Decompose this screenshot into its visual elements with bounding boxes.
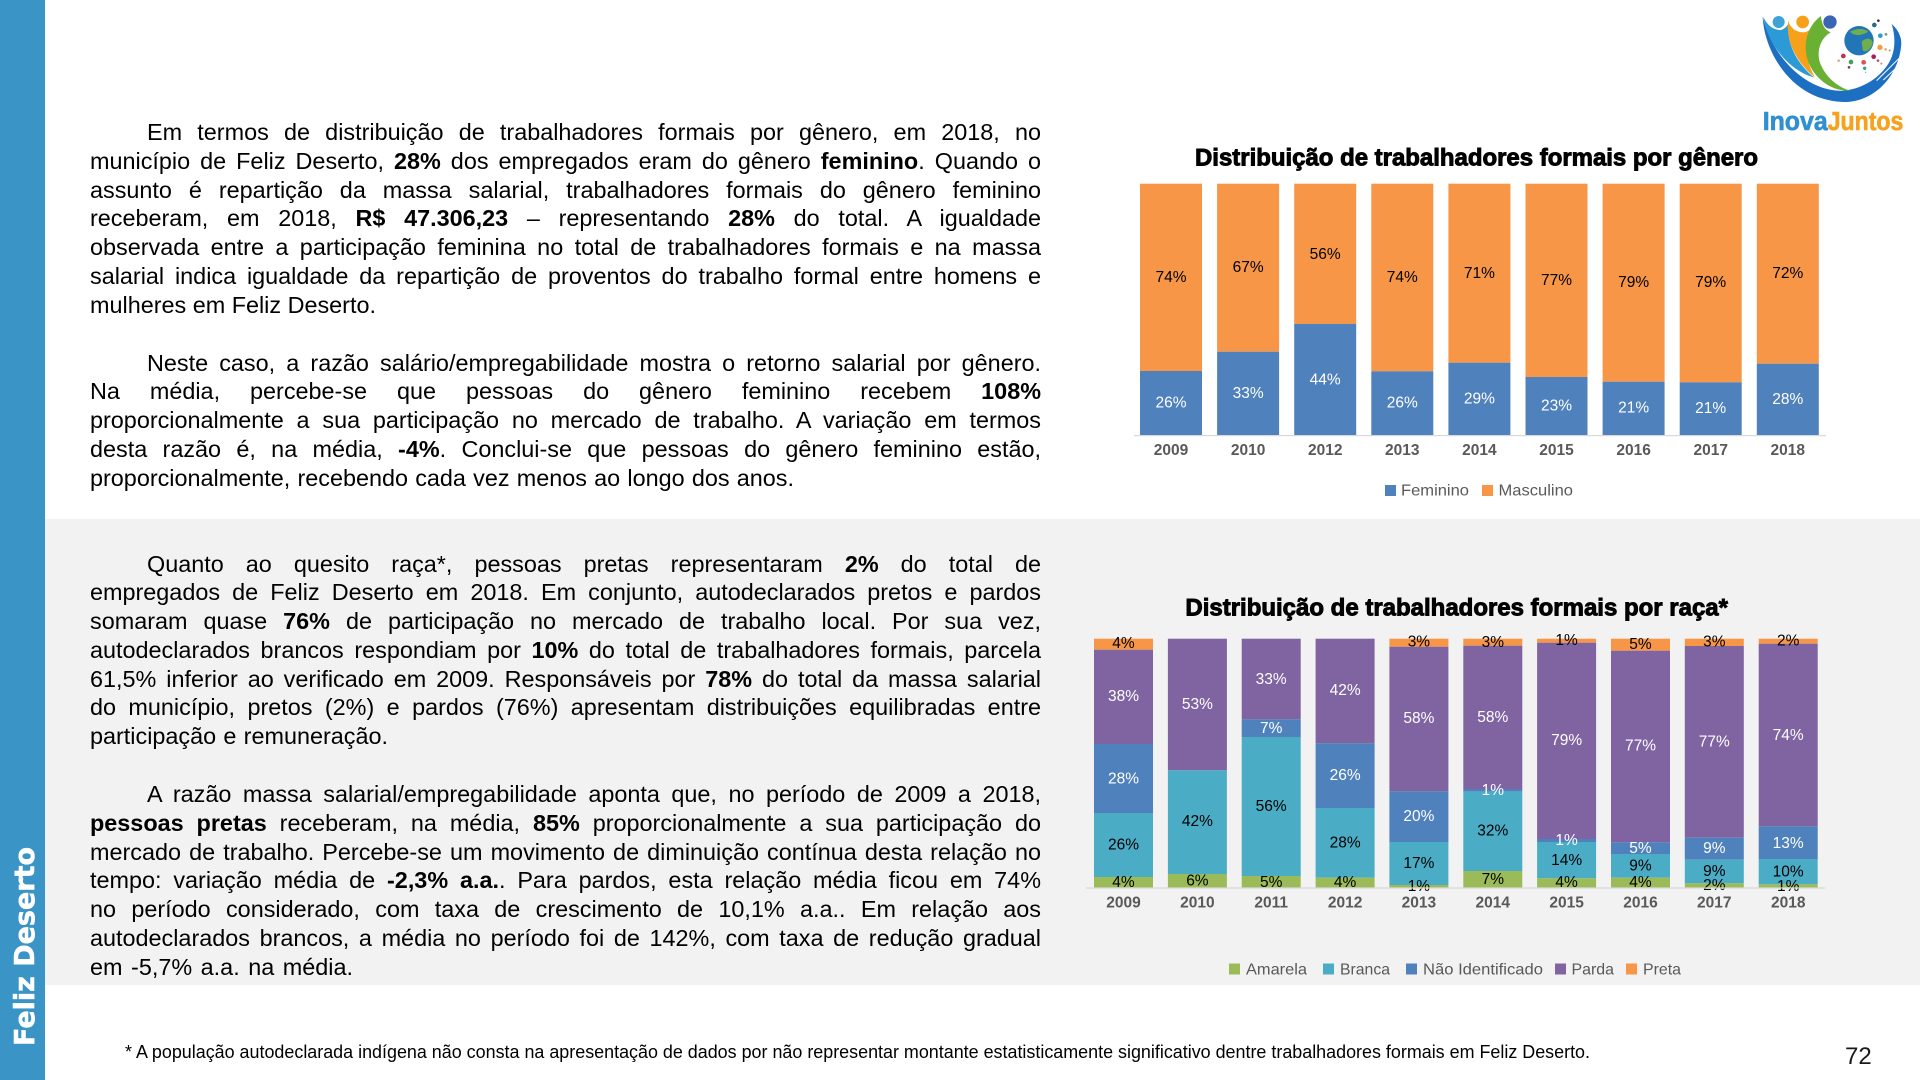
bar 2010: [1168, 639, 1227, 912]
text block: race paragraph 2: tempo: variação média de -2,3% a.a.. Para pardos, esta relação média ficou em 74%: [90, 867, 1041, 893]
bar 2015: 2015: [1549, 894, 1584, 912]
bar 2012: 42%: [1330, 682, 1361, 699]
legend: race: Branca: [1340, 962, 1390, 978]
bar 2013: 17%: [1403, 855, 1435, 872]
bar 2012: 56%: [1310, 246, 1341, 263]
bar 2009: 2009: [1154, 442, 1189, 459]
bar 2011: 7%: [1260, 720, 1283, 737]
bar 2009: 74%: [1155, 269, 1187, 286]
bar 2013: [1389, 634, 1448, 912]
bar 2013: 20%: [1403, 808, 1435, 825]
bar 2016: [1603, 184, 1665, 459]
footnote: * A população autodeclarada indígena não consta na apresentação de dados por não representar montante estatisticamente significativo dentre trabalhadores formais em Feliz Deserto.: [125, 1042, 1590, 1062]
sidebar band: [0, 0, 45, 1080]
bar 2012: 2012: [1328, 894, 1362, 912]
bar 2011: 5%: [1260, 874, 1283, 891]
bar 2011: 2011: [1254, 894, 1288, 912]
bar 2009: 2009: [1106, 894, 1141, 912]
legend: gender: Feminino: [1401, 482, 1469, 500]
bar 2017: 9%: [1703, 863, 1726, 880]
bar 2017: 2017: [1697, 894, 1732, 912]
bar 2016: 21%: [1618, 400, 1649, 416]
bar 2009: 4%: [1112, 874, 1135, 891]
bar 2015: 14%: [1551, 852, 1582, 869]
bar 2014: 29%: [1464, 390, 1495, 408]
bar 2014: [1448, 184, 1510, 459]
legend: race: Parda: [1572, 962, 1614, 978]
bar 2013: 3%: [1408, 634, 1430, 650]
bar 2015: 4%: [1555, 874, 1578, 891]
text block: gender paragraph 1: observada entre a participação feminina no total de trabalhadores formais e na massa: [90, 234, 1041, 260]
bar 2010: 2010: [1180, 894, 1215, 912]
bar 2012: [1316, 639, 1375, 912]
bar 2011: [1242, 639, 1301, 912]
legend: race: Preta: [1643, 962, 1681, 978]
page number: 72: [1845, 1043, 1872, 1070]
text block: race paragraph 1: empregados de Feliz Deserto em 2018. Em conjunto, autodeclarados pretos e pardos: [90, 579, 1041, 605]
bar 2015: [1526, 184, 1588, 459]
bar 2013: [1371, 184, 1433, 459]
bar 2010: 42%: [1182, 813, 1213, 830]
bar 2014: 7%: [1482, 871, 1504, 888]
chart title: gender: Distribuição de trabalhadores formais por gênero: [1195, 145, 1758, 172]
legend: race: Amarela: [1246, 962, 1307, 978]
text block: race paragraph 2: em -5,7% a.a. na média.: [90, 954, 353, 980]
bar 2012: 28%: [1330, 834, 1361, 852]
bar 2013: 26%: [1387, 394, 1418, 412]
bar 2017: 3%: [1703, 634, 1726, 650]
text block: gender paragraph 1: assunto é repartição da massa salarial, trabalhadores formais do gênero feminino: [90, 177, 1041, 203]
bar 2012: 26%: [1330, 767, 1361, 784]
text block: race paragraph 2: pessoas pretas receberam, na média, 85% proporcionalmente a sua participação do: [90, 810, 1041, 836]
text block: race paragraph 1: [90, 550, 1041, 749]
text block: gender paragraph 2: Neste caso, a razão salário/empregabilidade mostra o retorno salarial por gênero.: [147, 350, 1041, 376]
bar 2016: 5%: [1629, 840, 1652, 857]
text block: gender paragraph 1: [90, 119, 1041, 318]
bar 2011: 56%: [1256, 798, 1287, 815]
bar 2015: 1%: [1555, 832, 1578, 849]
stacked bar chart: gender: [1134, 184, 1826, 459]
legend: race: [1229, 962, 1681, 978]
bar 2010: 67%: [1233, 259, 1264, 276]
bar 2012: 44%: [1310, 372, 1341, 388]
text block: race paragraph 1: do município, pretos (2%) e pardos (76%) apresentam distribuições equilibradas entre: [90, 694, 1041, 720]
legend: gender: Masculino: [1498, 482, 1573, 500]
text block: race paragraph 1: 61,5% inferior ao verificado em 2009. Responsáveis por 78% do total da massa salarial: [90, 666, 1041, 692]
text block: gender paragraph 1: município de Feliz Deserto, 28% dos empregados eram do gênero feminino. Quando o: [90, 148, 1041, 174]
legend: gender: [1385, 482, 1573, 500]
bar 2010: 6%: [1186, 872, 1209, 890]
bar 2017: 77%: [1699, 734, 1730, 750]
bar 2016: 77%: [1625, 738, 1656, 754]
text block: gender paragraph 1: receberam, em 2018, R$ 47.306,23 – representando 28% do total. A igualdade: [90, 205, 1041, 231]
bar 2009: 26%: [1108, 836, 1139, 854]
bar 2017: 2017: [1693, 442, 1728, 459]
bar 2015: 77%: [1541, 272, 1572, 289]
bar 2009: 28%: [1108, 770, 1139, 788]
text block: gender paragraph 2: [90, 350, 1041, 491]
bar 2013: 74%: [1387, 269, 1418, 286]
bar 2012: 4%: [1334, 874, 1357, 891]
bar 2009: 4%: [1112, 635, 1135, 652]
bar 2014: 71%: [1464, 265, 1495, 282]
text block: race paragraph 1: somaram quase 76% de participação no mercado de trabalho local. Por sua vez,: [90, 608, 1041, 634]
sidebar label: Feliz Deserto: [8, 847, 41, 1046]
stacked bar chart: race: [1086, 632, 1825, 912]
bar 2018: 10%: [1773, 864, 1804, 880]
bar 2015: 2015: [1539, 442, 1574, 459]
bar 2016: [1611, 636, 1670, 912]
icon: InovaJuntos logo: Inova: [1763, 108, 1828, 136]
text block: gender paragraph 1: salarial indica igualdade da repartição de proventos do trabalho formal entre homens e: [90, 263, 1041, 289]
bar 2015: [1537, 632, 1596, 912]
bar 2009: 38%: [1108, 688, 1139, 705]
bar 2017: [1680, 184, 1742, 459]
bar 2012: [1294, 184, 1356, 459]
bar 2018: 2%: [1777, 632, 1800, 650]
bar 2014: [1463, 634, 1522, 912]
bar 2011: 33%: [1256, 671, 1287, 688]
text block: gender paragraph 2: proporcionalmente, recebendo cada vez menos ao longo dos anos.: [90, 465, 794, 491]
text block: race paragraph 1: autodeclarados brancos respondiam por 10% do total de trabalhadores formais, parcela: [90, 637, 1041, 663]
bar 2013: 1%: [1408, 878, 1430, 895]
bar 2013: 58%: [1403, 710, 1435, 727]
bar 2017: 9%: [1703, 840, 1726, 857]
bar 2013: 2013: [1402, 894, 1437, 912]
bar 2009: 26%: [1155, 394, 1187, 412]
text block: race paragraph 2: autodeclarados brancos, a média no período foi de 142%, com taxa de redução gradual: [90, 925, 1041, 951]
text block: race paragraph 2: A razão massa salarial/empregabilidade aponta que, no período de 2009 a 2018,: [147, 781, 1041, 807]
bar 2017: [1685, 634, 1744, 912]
bar 2010: 2010: [1231, 442, 1265, 459]
bar 2018: 28%: [1772, 391, 1804, 408]
bar 2015: 1%: [1555, 632, 1578, 649]
bar 2014: 58%: [1477, 709, 1509, 726]
bar 2014: 2014: [1462, 442, 1497, 459]
text block: race paragraph 2: no período considerado, com taxa de crescimento de 10,1% a.a.. Em relação aos: [90, 896, 1041, 922]
bar 2018: 13%: [1773, 835, 1804, 852]
bar 2014: 32%: [1477, 822, 1509, 840]
bar 2015: 23%: [1541, 398, 1572, 414]
bar 2017: 79%: [1695, 274, 1726, 291]
bar 2016: 2016: [1616, 442, 1651, 459]
bar 2017: 2%: [1703, 877, 1726, 894]
bar 2018: 74%: [1773, 727, 1804, 744]
text block: race paragraph 1: participação e remuneração.: [90, 723, 388, 749]
grey panel: race section background: [45, 519, 1920, 985]
legend: race: Não Identificado: [1423, 962, 1543, 978]
text block: gender paragraph 2: proporcionalmente a sua participação no mercado de trabalho. A variação em termos: [90, 407, 1041, 433]
bar 2018: 1%: [1777, 878, 1800, 895]
bar 2018: [1757, 184, 1819, 459]
text block: race paragraph 2: [90, 781, 1041, 980]
icon: InovaJuntos logo: Juntos: [1828, 108, 1903, 136]
bar 2014: 2014: [1476, 894, 1510, 912]
bar 2009: [1140, 184, 1202, 459]
chart title: race: Distribuição de trabalhadores formais por raça*: [1185, 595, 1729, 622]
bar 2014: 3%: [1482, 634, 1504, 651]
bar 2016: 9%: [1629, 858, 1652, 874]
text block: gender paragraph 1: Em termos de distribuição de trabalhadores formais por gênero, em 2018, no: [147, 119, 1041, 145]
icon: InovaJuntos logo: [1763, 15, 1903, 136]
text block: race paragraph 2: mercado de trabalho. Percebe-se um movimento de diminuição contínua desta relação no: [90, 839, 1041, 865]
text block: gender paragraph 1: mulheres em Feliz Deserto.: [90, 292, 376, 318]
bar 2010: 53%: [1182, 696, 1213, 713]
bar 2016: 79%: [1618, 274, 1649, 291]
bar 2010: [1217, 184, 1279, 459]
bar 2018: 2018: [1771, 442, 1805, 459]
bar 2017: 21%: [1695, 400, 1726, 417]
bar 2013: 2013: [1385, 442, 1420, 459]
text block: gender paragraph 2: Na média, percebe-se que pessoas do gênero feminino recebem 108%: [90, 378, 1041, 404]
text block: gender paragraph 2: desta razão é, na média, -4%. Conclui-se que pessoas do gênero feminino estão,: [90, 436, 1041, 462]
bar 2018: 72%: [1772, 265, 1804, 282]
bar 2014: 1%: [1482, 782, 1504, 799]
bar 2016: 2016: [1623, 894, 1658, 912]
text block: race paragraph 1: Quanto ao quesito raça*, pessoas pretas representaram 2% do total de: [147, 550, 1041, 576]
bar 2015: 79%: [1551, 732, 1582, 749]
bar 2016: 4%: [1629, 874, 1652, 891]
bar 2012: 2012: [1308, 442, 1342, 459]
bar 2016: 5%: [1629, 636, 1652, 653]
bar 2018: [1759, 632, 1818, 912]
bar 2009: [1094, 635, 1153, 912]
bar 2018: 2018: [1771, 894, 1806, 912]
bar 2010: 33%: [1233, 385, 1264, 402]
